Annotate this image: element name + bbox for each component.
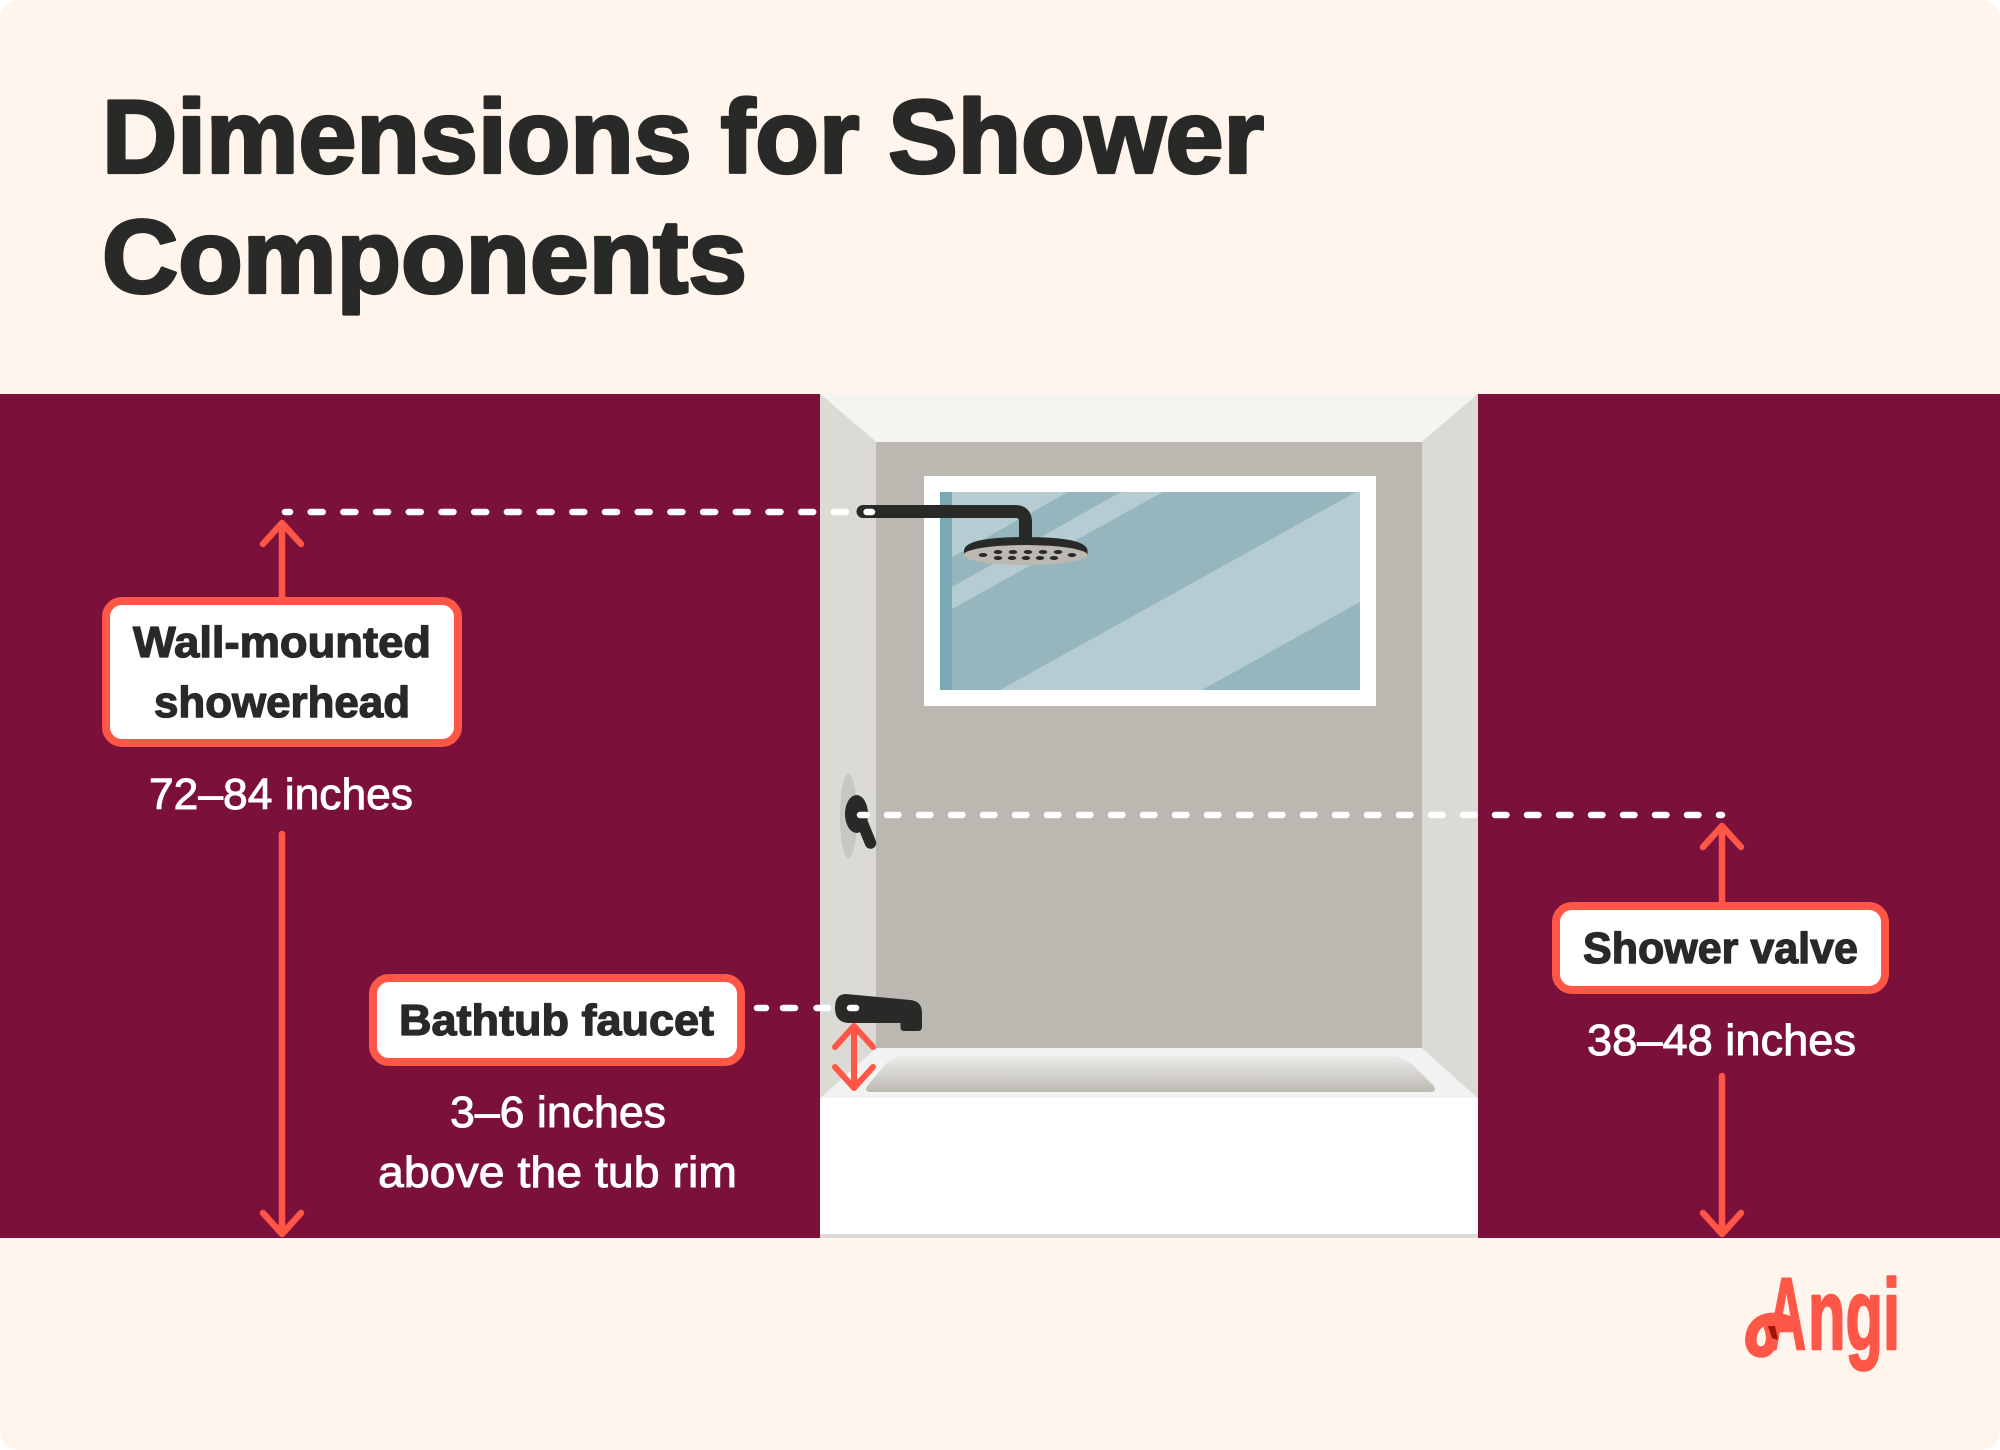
arrow: valve up: [1703, 826, 1741, 902]
measurement: 3–6 inches above the tub rim: 3–6 inches: [450, 1088, 666, 1137]
logo: Angi: [1751, 1257, 1900, 1371]
back wall: [820, 394, 1478, 1098]
arrow: showerhead down: [263, 834, 301, 1234]
label: wall-mounted showerhead: showerhead: [154, 678, 410, 727]
title: Components: [102, 200, 747, 316]
arrow: faucet double-headed: [835, 1026, 873, 1088]
dashed guide: valve height: [860, 812, 1722, 818]
window: [924, 476, 1376, 706]
right side wall: [1422, 394, 1478, 1098]
arrow: showerhead up: [263, 523, 301, 597]
tub rim: [820, 1048, 1478, 1098]
left side wall: [820, 394, 876, 1098]
wine background band: [0, 394, 2000, 1238]
label: wall-mounted showerhead: Wall-mounted: [133, 618, 431, 667]
tub basin: [866, 1056, 1435, 1092]
logo: Angi: A: [1767, 1257, 1806, 1371]
dashed guide: showerhead height: [285, 509, 872, 515]
measurement: 3–6 inches above the tub rim: [378, 1088, 737, 1197]
icon: bathtub faucet: [835, 994, 922, 1031]
icon: shower valve: [840, 774, 870, 858]
label: shower valve: Shower valve: [1583, 924, 1858, 973]
title: Dimensions for Shower: [102, 80, 1264, 196]
logo: Angi: ngi: [1808, 1259, 1900, 1371]
tub front: [820, 1098, 1478, 1234]
dashed guide: faucet height: [757, 1005, 856, 1011]
icon: wall-mounted showerhead: [863, 512, 1088, 565]
label: shower valve: [1556, 906, 1885, 990]
measurement: 38–48 inches: 38–48 inches: [1587, 1016, 1856, 1065]
label: wall-mounted showerhead: [106, 601, 458, 743]
measurement: 3–6 inches above the tub rim: above the tub rim: [378, 1148, 737, 1197]
measurement: 72–84 inches: 72–84 inches: [149, 770, 413, 819]
arrow: valve down: [1703, 1076, 1741, 1234]
shower illustration: [820, 394, 1478, 1238]
label: bathtub faucet: [373, 978, 741, 1062]
label: bathtub faucet: Bathtub faucet: [399, 996, 714, 1045]
title: [102, 80, 1264, 316]
ceiling: [820, 394, 1478, 442]
